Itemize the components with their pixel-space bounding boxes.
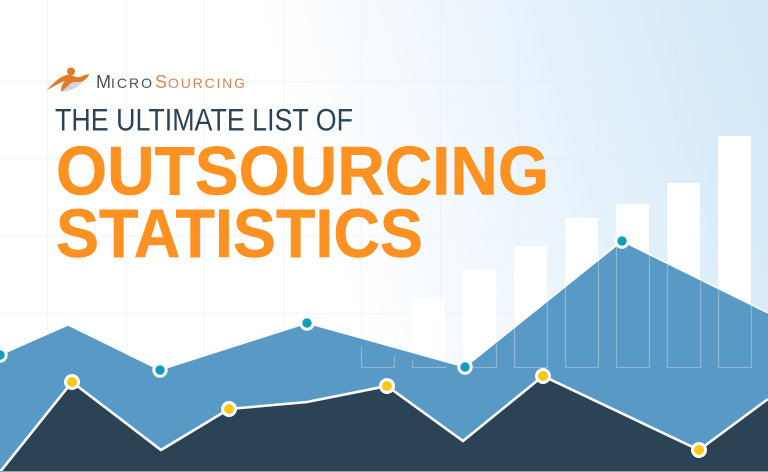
logo wordmark: S xyxy=(155,72,167,92)
title: OUTSOURCING xyxy=(56,132,549,210)
blue area top line xyxy=(0,241,768,370)
dark area top line xyxy=(0,376,768,472)
teal data points xyxy=(0,235,628,376)
yellow data points xyxy=(66,370,706,456)
logo icon xyxy=(47,68,89,92)
title: STATISTICS xyxy=(56,195,423,272)
dark area chart xyxy=(0,376,768,472)
bar outlines over blue area xyxy=(362,245,752,368)
bar chart: white rising bars xyxy=(361,136,751,367)
title xyxy=(56,132,549,272)
bottom edge xyxy=(0,471,768,472)
logo wordmark: ICRO xyxy=(111,75,152,91)
logo wordmark: OURCING xyxy=(168,75,245,91)
logo wordmark: M xyxy=(96,72,111,92)
blue area chart xyxy=(0,241,768,472)
subtitle: THE ULTIMATE LIST OF xyxy=(55,102,353,138)
logo wordmark xyxy=(96,72,245,92)
